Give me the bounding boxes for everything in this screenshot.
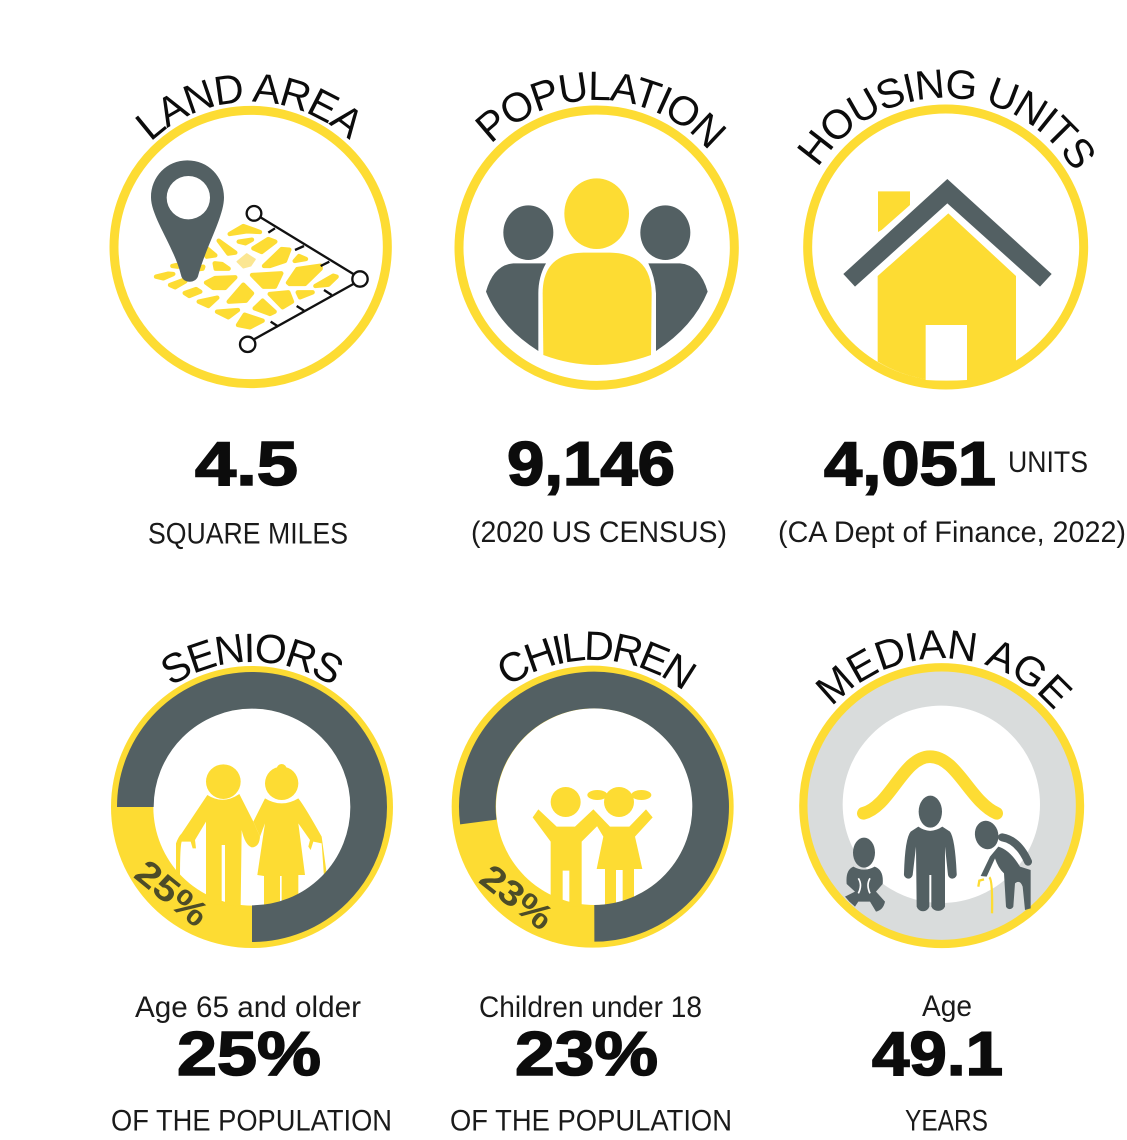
label: of the population: OF THE POPULATION bbox=[450, 1104, 732, 1138]
heading: seniors: SENIORS bbox=[162, 634, 342, 682]
chart: children donut 23% bbox=[452, 666, 734, 948]
value: 49.1: 49.1 bbox=[872, 1020, 1003, 1089]
chart: seniors donut 25% bbox=[111, 666, 393, 948]
value: 23%: 23% bbox=[515, 1020, 658, 1089]
panel: children bbox=[450, 632, 734, 1138]
value: 4,051: 4,051 bbox=[824, 430, 996, 499]
label: 2020 US census: (2020 US CENSUS) bbox=[471, 516, 727, 549]
heading: children: CHILDREN bbox=[500, 632, 697, 690]
value: 25%: 25% bbox=[177, 1020, 321, 1089]
icon: land area map and pin bbox=[114, 110, 387, 384]
label: age 65 and older: Age 65 and older bbox=[135, 991, 361, 1024]
icon: two children bbox=[533, 787, 653, 907]
panel: housing units bbox=[778, 70, 1126, 549]
heading: median age: MEDIAN AGE bbox=[815, 630, 1073, 710]
label: age: Age bbox=[922, 990, 972, 1023]
label: children under 18: Children under 18 bbox=[479, 991, 702, 1024]
value: 4.5: 4.5 bbox=[195, 430, 298, 499]
label: square miles: SQUARE MILES bbox=[148, 518, 348, 550]
panel: population bbox=[454, 72, 739, 549]
icon: age curve with baby, adult and elder bbox=[803, 667, 1080, 944]
label: years: YEARS bbox=[905, 1104, 988, 1138]
panel: land area bbox=[110, 74, 392, 550]
panel: median age bbox=[799, 630, 1084, 1138]
heading: population: POPULATION bbox=[475, 72, 726, 148]
label: 25% on ring: 25% bbox=[127, 853, 216, 935]
icon: three people bbox=[459, 110, 734, 385]
heading: land area: LAND AREA bbox=[135, 74, 358, 140]
value: 9,146: 9,146 bbox=[507, 430, 675, 499]
heading: housing units: HOUSING UNITS bbox=[797, 70, 1094, 168]
panel: seniors bbox=[111, 634, 393, 1138]
icon: senior couple bbox=[176, 764, 327, 907]
label: 23% on ring: 23% bbox=[472, 857, 561, 938]
icon: house bbox=[808, 109, 1084, 385]
label: units: UNITS bbox=[1008, 446, 1088, 479]
label: of the population: OF THE POPULATION bbox=[111, 1104, 392, 1138]
